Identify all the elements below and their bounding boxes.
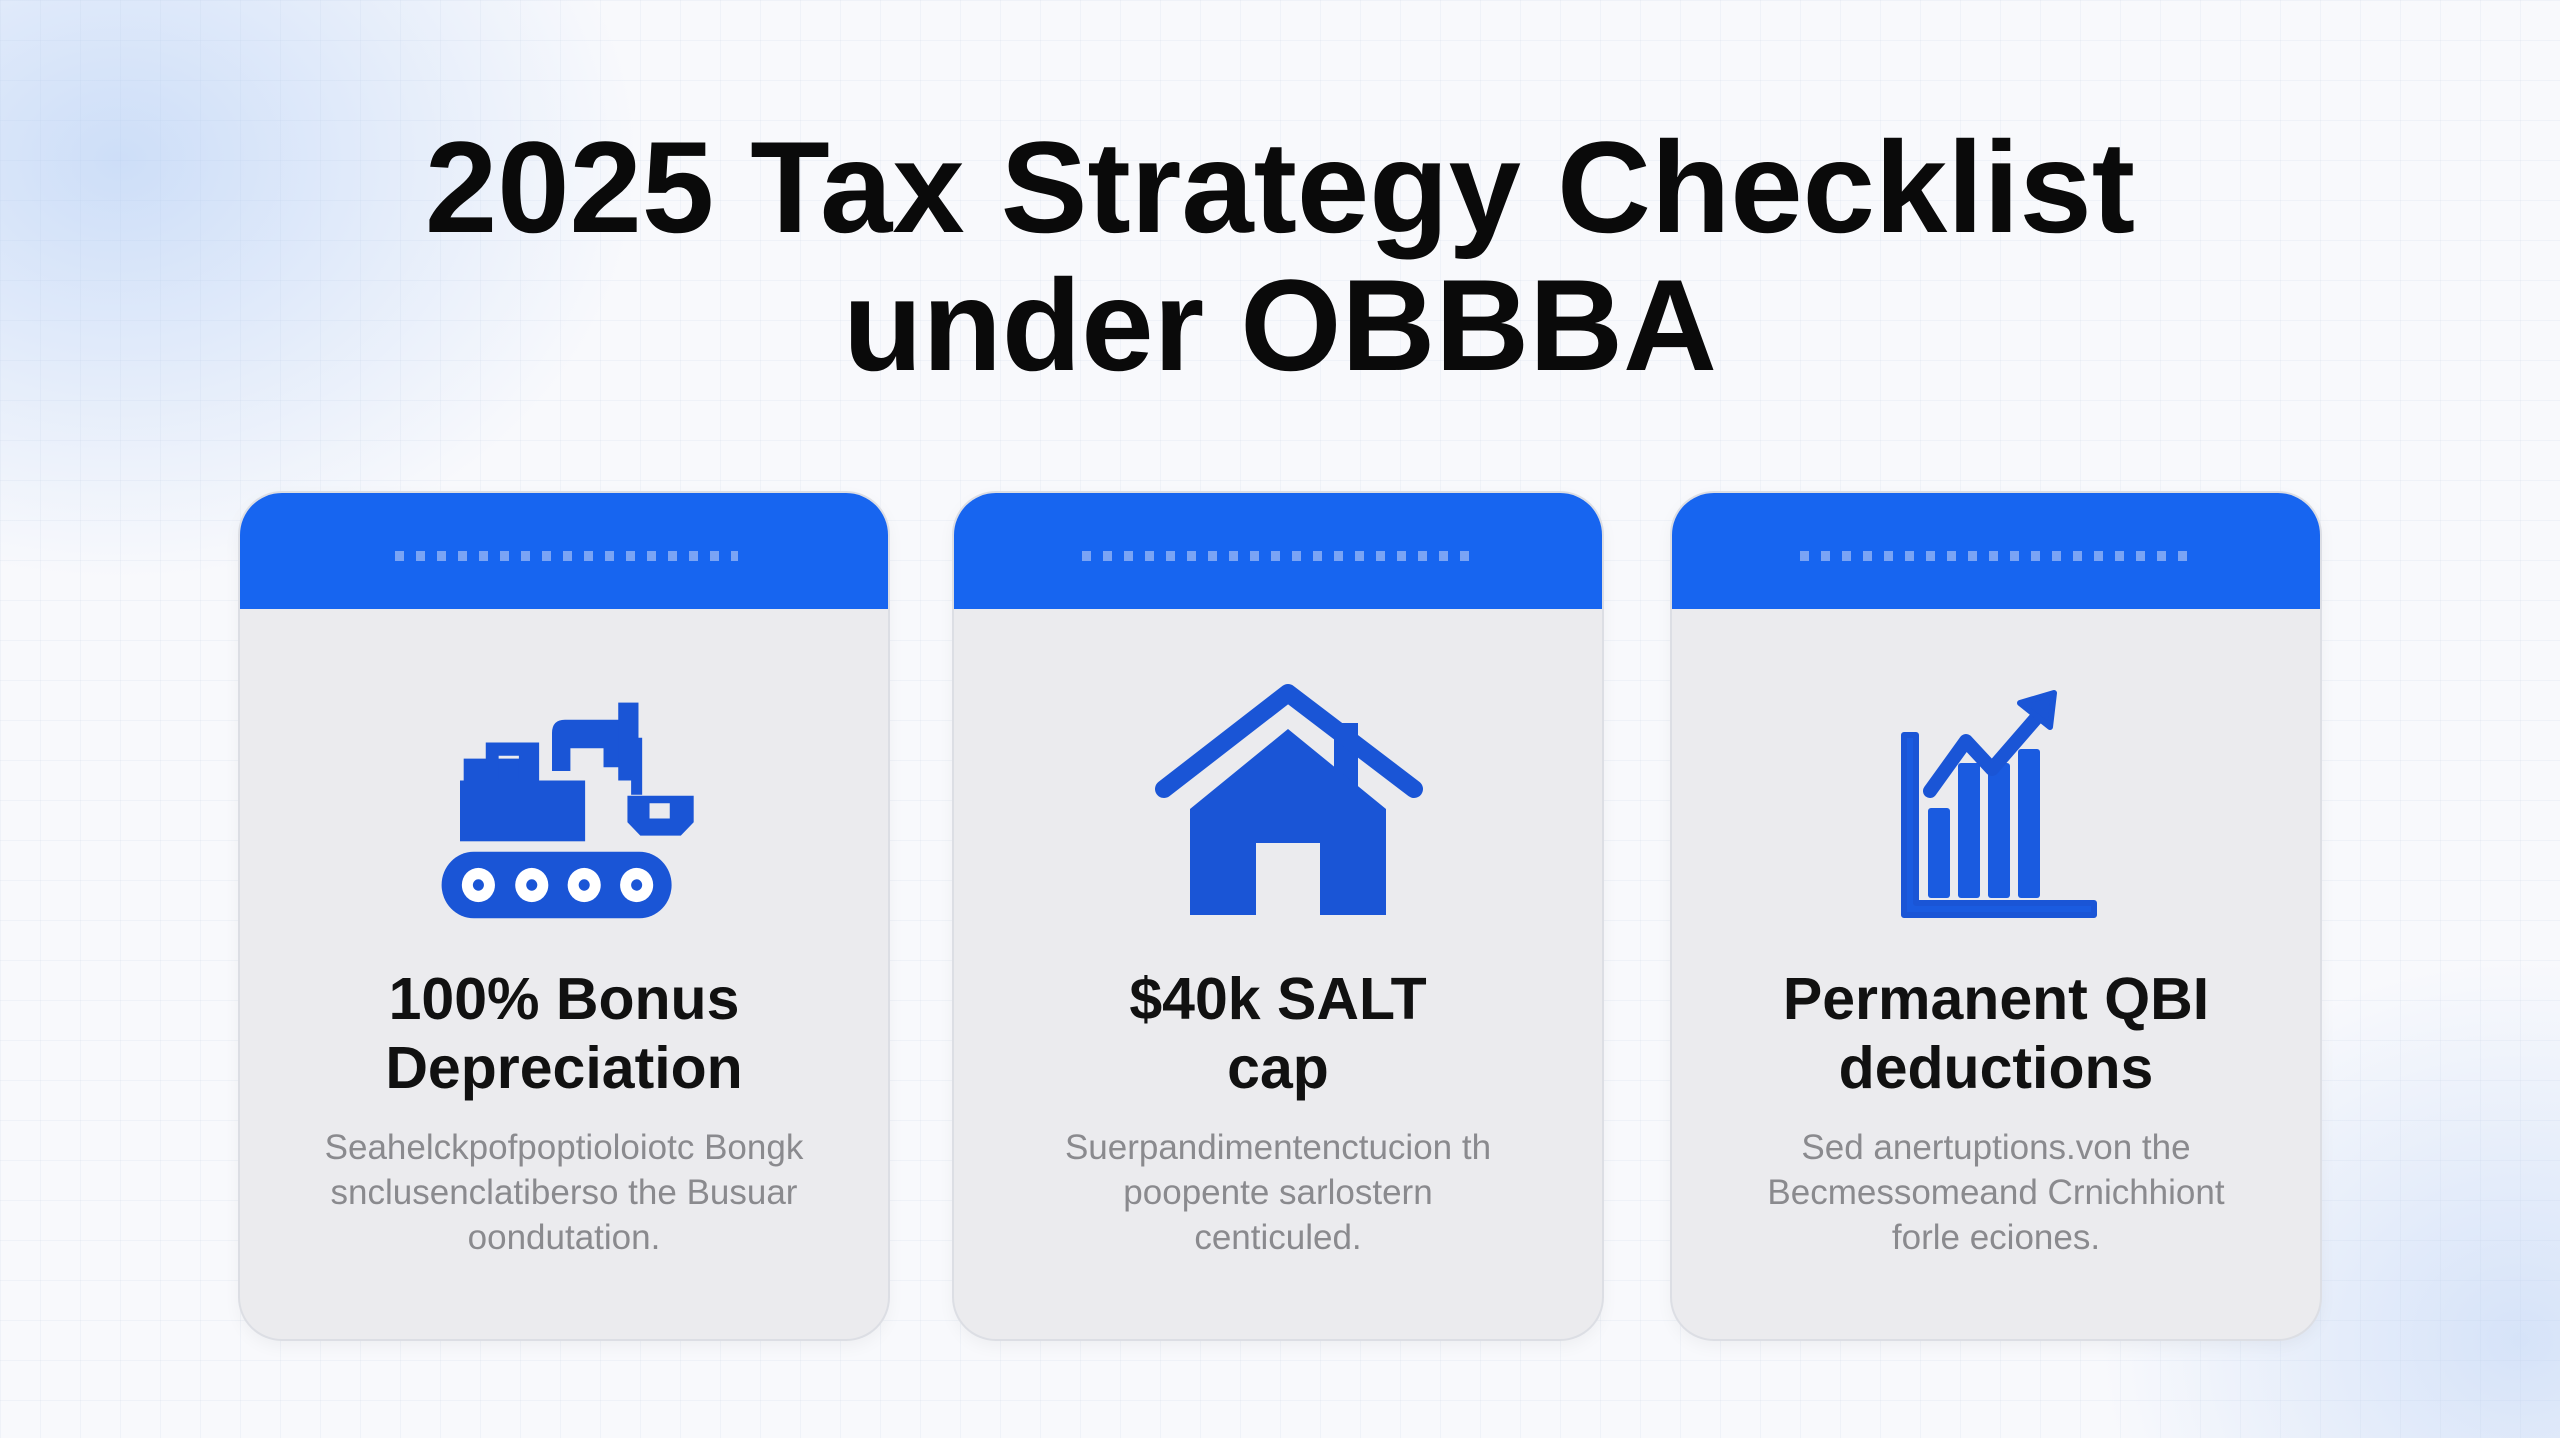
card header <box>240 493 888 609</box>
panel: QBI deductions <box>1672 493 2320 1339</box>
body text <box>1065 1128 1491 1257</box>
panel: bonus depreciation <box>240 493 888 1339</box>
heading <box>385 966 743 1101</box>
body text: Seahelckpofpoptioloiotc Bongk <box>325 1128 803 1167</box>
body text: snclusenclatiberso the Busuar <box>331 1173 797 1212</box>
heading: Depreciation <box>385 1035 743 1101</box>
heading <box>1129 966 1427 1101</box>
card header <box>954 493 1602 609</box>
body text: poopente sarlostern <box>1123 1173 1433 1212</box>
title: 2025 Tax Strategy Checklist <box>425 114 2135 260</box>
body text: forle eciones. <box>1892 1218 2100 1257</box>
card header <box>1672 493 2320 609</box>
icon: house <box>1155 684 1423 915</box>
heading: Permanent QBI <box>1783 966 2209 1032</box>
heading <box>1783 966 2209 1101</box>
body text: oondutation. <box>468 1218 660 1257</box>
body text: Suerpandimentenctucion th <box>1065 1128 1491 1167</box>
icon: excavator <box>442 702 694 918</box>
body text: Becmessomeand Crnichhiont <box>1767 1173 2225 1212</box>
heading: deductions <box>1839 1035 2153 1101</box>
heading: cap <box>1227 1035 1329 1101</box>
title: under OBBBA <box>843 252 1717 398</box>
body text <box>325 1128 804 1257</box>
body text: centiculed. <box>1194 1218 1362 1257</box>
body text <box>1767 1128 2225 1257</box>
heading: $40k SALT <box>1129 966 1427 1032</box>
panel: SALT cap <box>954 493 1602 1339</box>
body text: Sed anertuptions.von the <box>1801 1128 2191 1167</box>
title <box>425 114 2135 398</box>
icon: bar chart with arrow <box>1901 690 2097 918</box>
heading: 100% Bonus <box>389 966 739 1032</box>
